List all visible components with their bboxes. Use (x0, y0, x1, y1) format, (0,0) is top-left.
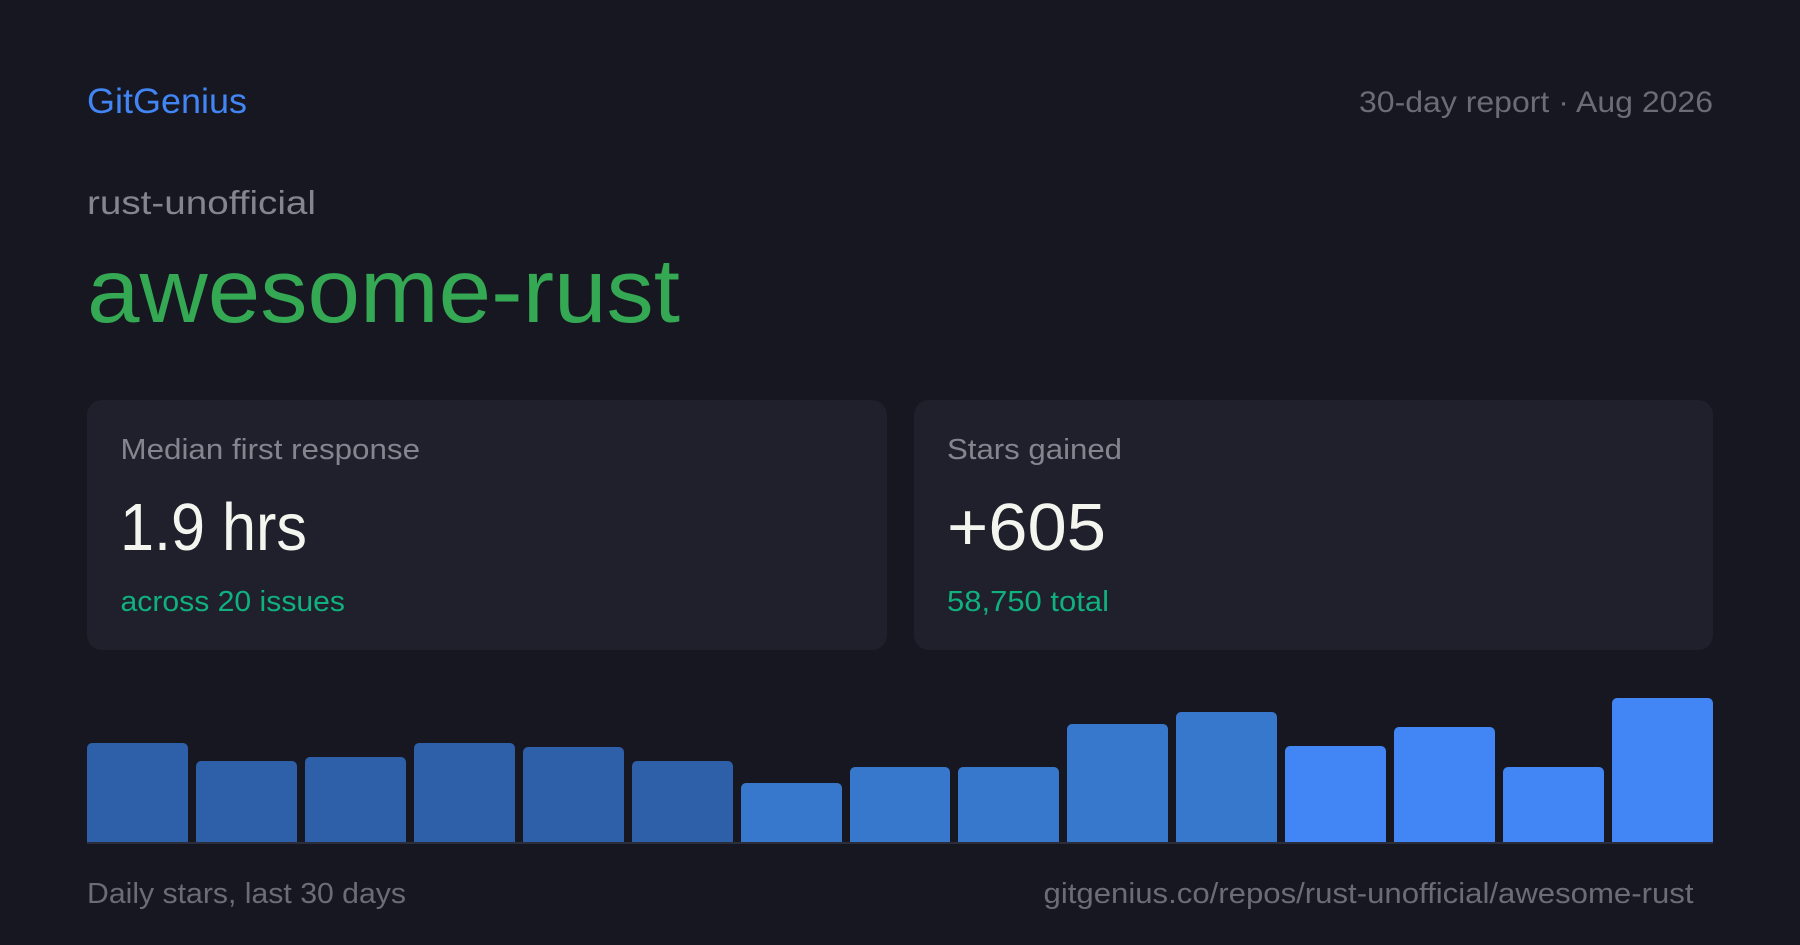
panel: stars gained (914, 400, 1713, 650)
chart caption: Daily stars, last 30 days (87, 878, 406, 910)
repository url: gitgenius.co/repos/rust-unofficial/awesome-rust (1044, 878, 1694, 910)
bar chart: daily stars (87, 698, 1713, 844)
label: median first response: Median first response (120, 434, 420, 466)
brand: GitGenius: GitGenius (87, 82, 247, 121)
title: repository name: awesome-rust (87, 241, 680, 342)
detail: total stars: 58,750 total (947, 586, 1109, 618)
panel: median first response (87, 400, 887, 650)
detail: issue count: across 20 issues (120, 586, 345, 618)
label: stars gained: Stars gained (947, 434, 1122, 466)
repository owner: rust-unofficial (87, 184, 316, 221)
value: 1.9 hrs: 1.9 hrs (120, 490, 307, 565)
value: +605: +605 (947, 490, 1106, 565)
report period: 30-day report · Aug 2026 (1359, 86, 1713, 119)
